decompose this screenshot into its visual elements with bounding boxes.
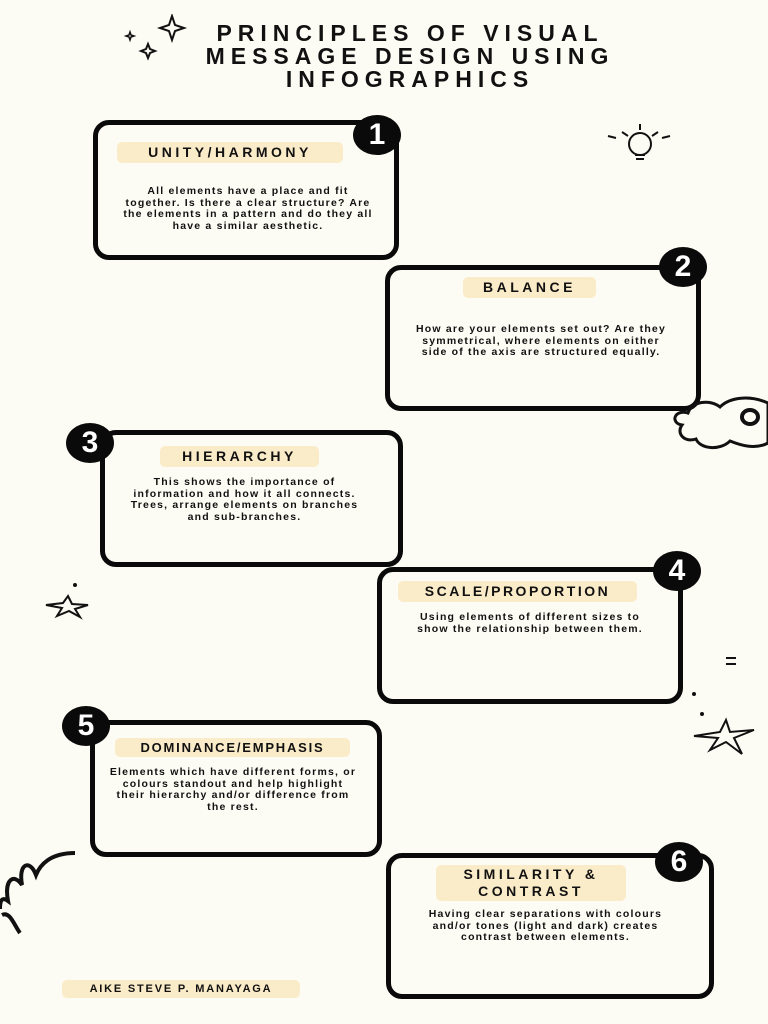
text 5: Elements which have different forms, or colours standout and help highlight their hierarchy and/or difference from the rest. <box>110 766 356 812</box>
number 3: 3 <box>82 426 98 459</box>
label 3: HIERARCHY <box>182 448 297 464</box>
number 5: 5 <box>78 709 94 742</box>
label 1 <box>117 142 343 163</box>
number 2 <box>659 247 707 287</box>
number 3 <box>66 423 114 463</box>
doodle: cloud <box>673 396 768 450</box>
icon: lightbulb <box>608 124 670 160</box>
title: PRINCIPLES OF VISUAL <box>216 20 604 46</box>
label 6: CONTRAST <box>478 883 584 899</box>
number 6: 6 <box>671 845 687 878</box>
doodle: star right <box>692 657 754 755</box>
label 1: UNITY/HARMONY <box>148 144 312 160</box>
title: MESSAGE DESIGN USING <box>206 43 614 69</box>
panel 5 <box>90 720 382 857</box>
number 2: 2 <box>675 250 691 283</box>
panel 3 <box>100 430 403 567</box>
label 4: SCALE/PROPORTION <box>425 583 610 599</box>
author <box>62 980 300 998</box>
panel 6 <box>386 853 714 999</box>
icon: sparkles <box>124 14 187 61</box>
label 3 <box>160 446 319 467</box>
label 2 <box>463 277 596 298</box>
number 6 <box>655 842 703 882</box>
text 1: All elements have a place and fit together. Is there a clear structure? Are the elements in a pattern and do they all have a similar aesthetic. <box>123 185 373 232</box>
text 3: This shows the importance of information and how it all connects. Trees, arrange elements on branches and sub-branches. <box>131 476 358 522</box>
panel 4 <box>377 567 683 704</box>
number 4: 4 <box>669 554 685 587</box>
label 5 <box>115 738 350 757</box>
author: AIKE STEVE P. MANAYAGA <box>90 983 272 995</box>
number 5 <box>62 706 110 746</box>
label 6 <box>436 865 626 901</box>
doodle: star left <box>46 583 88 620</box>
label 5: DOMINANCE/EMPHASIS <box>140 740 325 755</box>
text 4: Using elements of different sizes to show the relationship between them. <box>417 611 643 634</box>
doodle: squiggle <box>0 851 75 934</box>
panel 2 <box>385 265 701 411</box>
title: INFOGRAPHICS <box>286 66 534 92</box>
text 6: Having clear separations with colours and/or tones (light and dark) creates contrast between elements. <box>429 908 662 943</box>
text 2: How are your elements set out? Are they symmetrical, where elements on either side of the axis are structured equally. <box>416 323 666 358</box>
label 2: BALANCE <box>483 279 576 295</box>
title <box>206 20 614 92</box>
panel 1 <box>93 120 399 260</box>
number 1 <box>353 115 401 155</box>
number 4 <box>653 551 701 591</box>
label 6: SIMILARITY & <box>463 866 599 882</box>
label 4 <box>398 581 637 602</box>
number 1: 1 <box>369 118 385 151</box>
